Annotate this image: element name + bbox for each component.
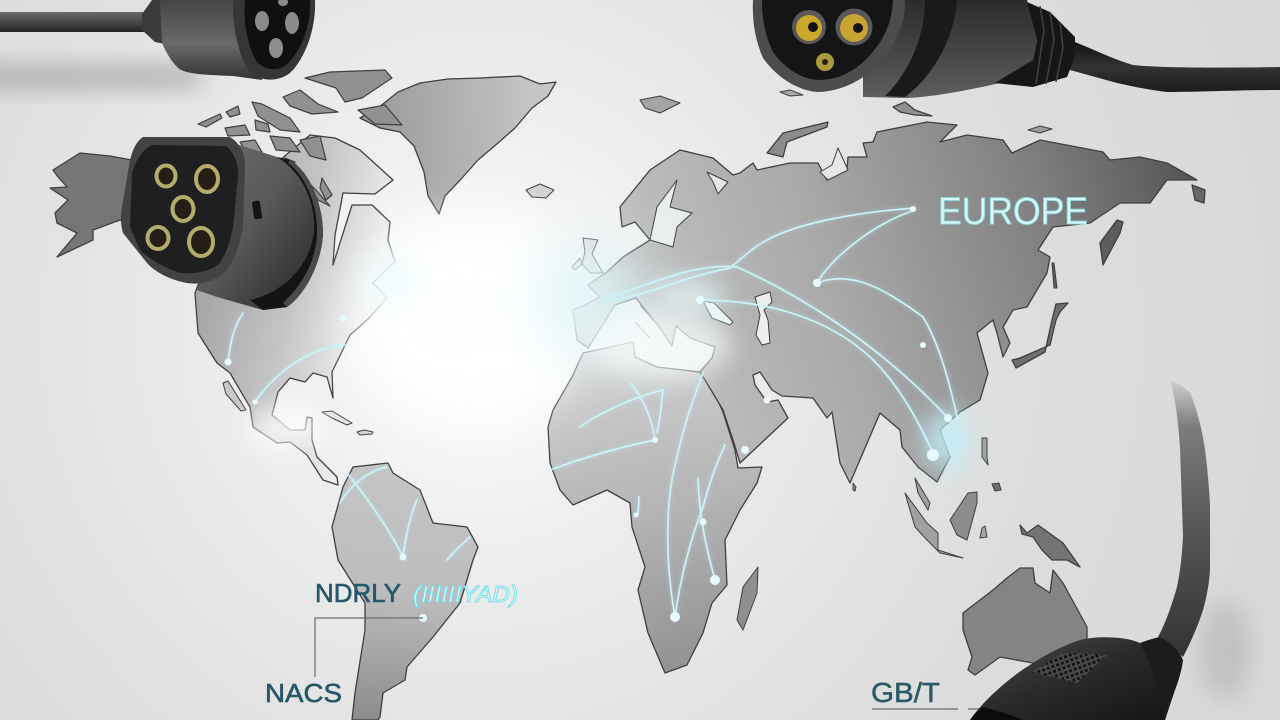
inlet: Baltic Sea xyxy=(650,180,692,247)
island: Mindanao xyxy=(992,483,1001,491)
shadow xyxy=(0,68,200,86)
island: New Siberian xyxy=(1028,126,1052,133)
cable xyxy=(1158,380,1210,657)
island: New Guinea xyxy=(1020,525,1080,567)
floor shadow xyxy=(1200,600,1250,700)
label: EUROPE: EUROPE xyxy=(938,191,1088,233)
strain relief xyxy=(1140,637,1183,720)
network routes: halo xyxy=(228,208,957,617)
label: garbled glowing text: (IIIIIIYAD) xyxy=(413,581,518,607)
barrel xyxy=(197,143,323,310)
inlet: White Sea xyxy=(707,172,728,194)
island: Borneo xyxy=(950,492,977,540)
island: Hispaniola xyxy=(357,430,373,435)
body xyxy=(863,0,1037,98)
network nodes xyxy=(224,206,952,622)
island: Kamchatka xyxy=(1100,220,1123,265)
continent: Arctic islands xyxy=(198,70,402,206)
inlet: Yamal gulf xyxy=(820,148,848,180)
inlet: Italy coast xyxy=(635,305,655,338)
continent: Alaska xyxy=(50,153,150,257)
island: Iceland xyxy=(526,184,554,198)
continent: Greenland xyxy=(360,76,556,214)
body xyxy=(160,0,262,80)
island: Cuba xyxy=(322,411,352,425)
island: Japan xyxy=(1012,303,1068,368)
face xyxy=(233,0,315,80)
cable xyxy=(1070,42,1280,92)
connector: main left xyxy=(121,137,323,310)
face xyxy=(121,137,245,284)
grille xyxy=(1032,653,1107,683)
cable xyxy=(0,12,145,32)
barrel rim xyxy=(283,160,323,307)
pins xyxy=(792,10,826,44)
pins xyxy=(255,11,269,31)
continent: Africa xyxy=(548,342,762,673)
island: Novaya Zemlya xyxy=(767,122,828,157)
continent: Eurasia xyxy=(573,122,1197,483)
island: Sri Lanka xyxy=(853,483,856,491)
face opening xyxy=(970,707,1023,720)
continent: North America xyxy=(195,135,395,485)
face xyxy=(753,0,905,92)
strain relief xyxy=(995,2,1075,87)
label: NORLY: NDRLY xyxy=(315,578,401,608)
island: Ireland xyxy=(572,258,582,270)
island: Malay peninsula xyxy=(915,478,930,510)
island: Sumatra xyxy=(905,493,963,558)
island: Baja California xyxy=(223,381,246,411)
label: NACS: NACS xyxy=(265,678,342,708)
connector: bottom right xyxy=(970,380,1250,720)
latch slot xyxy=(252,201,262,219)
island: Svalbard xyxy=(640,96,680,113)
island: Philippines xyxy=(982,438,988,465)
island: Madagascar xyxy=(737,567,758,630)
barrel shade xyxy=(250,157,323,310)
inlet: Caspian Sea xyxy=(755,292,772,345)
continent: Australia xyxy=(963,568,1087,675)
island: Commander xyxy=(1192,185,1205,203)
body groove xyxy=(885,0,957,97)
connector: top right xyxy=(753,0,1280,98)
label: GB/T: GB/T xyxy=(871,677,940,708)
network routes xyxy=(228,208,957,617)
glow: central light xyxy=(247,225,969,470)
inlet: Black Sea xyxy=(703,301,733,325)
island: Severnaya Zemlya xyxy=(893,102,932,116)
connector: top left xyxy=(0,0,315,86)
island: Sulawesi xyxy=(980,526,987,538)
strain relief xyxy=(142,0,165,44)
island: Britain xyxy=(582,238,603,273)
body xyxy=(970,637,1175,720)
pins xyxy=(148,166,218,256)
island: Sakhalin xyxy=(1052,263,1057,288)
continent: South America xyxy=(332,463,478,720)
leader line: GB/T xyxy=(872,708,985,710)
island: Franz Josef xyxy=(780,90,803,96)
leader line: NACS xyxy=(315,618,423,677)
